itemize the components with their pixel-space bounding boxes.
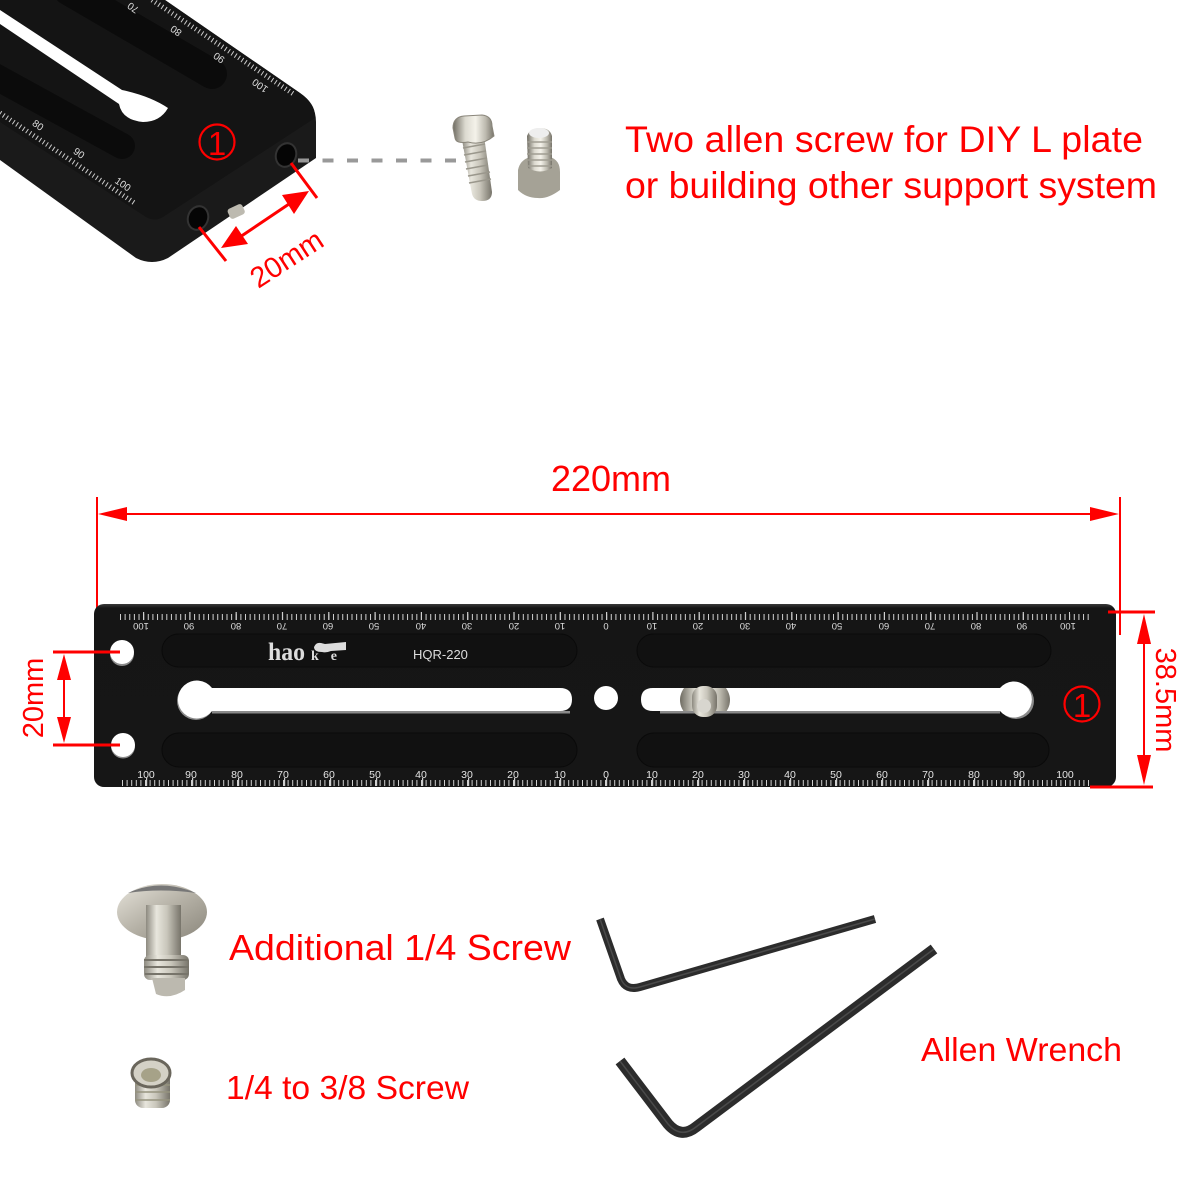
bottom ruler labels: 50 (369, 769, 381, 781)
bottom ruler labels (137, 769, 1074, 781)
upper ruler labels: 100 (250, 76, 271, 94)
left mounting holes (110, 640, 135, 757)
lower ruler labels: 80 (30, 118, 46, 134)
callout: allen screw note: or building other support system (625, 164, 1157, 206)
bottom ruler labels: 20 (507, 769, 519, 781)
top ruler labels: 30 (740, 620, 750, 631)
top ruler labels: 90 (184, 620, 194, 631)
20mm label: 20mm (18, 658, 50, 738)
38.5mm height dimension (1090, 612, 1155, 787)
bottom ruler ticks (122, 782, 1090, 783)
top ruler labels: 60 (879, 620, 889, 631)
lower ruler labels: 100 (112, 176, 133, 194)
plate top face (0, 0, 315, 220)
icon: large allen wrench (620, 949, 934, 1132)
icon: allen screw one (453, 115, 494, 201)
model number: HQR-220 (413, 647, 468, 662)
icon: small allen wrench (600, 919, 875, 988)
label: allen wrench: Allen Wrench (921, 1031, 1122, 1068)
panel: angled plate close-up (0, 0, 456, 295)
lower ruler labels (30, 118, 133, 194)
callout: allen screw note: Two allen screw for DIY L plate (625, 118, 1143, 160)
bottom ruler labels: 10 (646, 769, 658, 781)
threaded hole left (184, 203, 212, 233)
panel: main plate (94, 604, 1116, 787)
top ruler labels: 90 (1017, 620, 1027, 631)
upper ruler labels (125, 0, 271, 94)
label: 1/4 to 3/8 screw: 1/4 to 3/8 Screw (226, 1069, 469, 1106)
bottom ruler labels: 90 (1013, 769, 1025, 781)
top ruler labels: 30 (462, 620, 472, 631)
top ruler labels: 40 (416, 620, 426, 631)
220mm dimension arrow (97, 497, 1120, 635)
slot bottom shadows (110, 642, 1034, 758)
upper ruler ticks (152, 0, 295, 95)
upper left groove (162, 634, 577, 667)
top ruler labels: 80 (231, 620, 241, 631)
lower ruler labels: 90 (71, 146, 87, 162)
threaded hole right (272, 140, 300, 170)
bottom ruler labels: 90 (185, 769, 197, 781)
bottom ruler labels: 20 (692, 769, 704, 781)
bottom ruler labels: 100 (1056, 769, 1074, 781)
circled number 1 (1064, 686, 1100, 724)
brand logo: ke (311, 649, 337, 664)
top ruler labels: 0 (603, 620, 609, 631)
lower groove (0, 68, 122, 146)
lower left groove (162, 733, 577, 767)
top ruler ticks (120, 616, 1090, 617)
top ruler labels: 20 (693, 620, 703, 631)
lower right groove (637, 733, 1049, 767)
keyhole slot (0, 10, 168, 122)
upper ruler labels: 80 (168, 22, 184, 38)
top ruler labels: 80 (971, 620, 981, 631)
left slot (178, 680, 572, 719)
top ruler labels: 100 (1060, 620, 1076, 631)
top ruler labels: 70 (925, 620, 935, 631)
bottom ruler labels: 30 (461, 769, 473, 781)
bottom ruler labels: 50 (830, 769, 842, 781)
bottom ruler labels: 60 (323, 769, 335, 781)
brand logo (268, 639, 346, 666)
top ruler labels: 50 (369, 620, 379, 631)
plate body (94, 604, 1116, 787)
bottom ruler labels: 10 (554, 769, 566, 781)
upper ruler labels: 90 (211, 49, 227, 65)
top ruler labels: 50 (832, 620, 842, 631)
right slot (641, 682, 1032, 718)
centre hole (594, 686, 618, 710)
top ruler labels: 40 (786, 620, 796, 631)
bottom ruler labels: 100 (137, 769, 155, 781)
brand logo: hao (268, 639, 305, 666)
220mm label: 220mm (551, 458, 671, 499)
top ruler labels: 70 (277, 620, 287, 631)
bottom ruler labels: 70 (277, 769, 289, 781)
bottom ruler labels: 80 (968, 769, 980, 781)
top ruler labels: 100 (133, 620, 149, 631)
top ruler labels: 10 (555, 620, 565, 631)
label: additional 1/4 screw: Additional 1/4 Screw (229, 927, 572, 968)
icon: additional 1/4 screw (117, 884, 207, 996)
icon: allen screw two (518, 128, 560, 198)
small screw under plate (227, 203, 246, 220)
circled number 1: 1 (1073, 687, 1091, 724)
20mm hole spacing dimension (53, 652, 120, 745)
screw in slot (680, 686, 730, 717)
bottom ruler labels: 60 (876, 769, 888, 781)
bottom ruler labels: 70 (922, 769, 934, 781)
icon: 1/4 to 3/8 adapter (132, 1059, 170, 1108)
20mm dimension arrow (199, 163, 317, 261)
38.5mm label: 38.5mm (1149, 648, 1181, 752)
circled number 1: 1 (208, 125, 226, 162)
bottom ruler labels: 30 (738, 769, 750, 781)
bottom ruler labels: 80 (231, 769, 243, 781)
circled number 1 (200, 124, 234, 162)
dashed leader line (298, 158, 456, 162)
bottom ruler labels: 40 (784, 769, 796, 781)
bottom ruler labels: 40 (415, 769, 427, 781)
lower ruler ticks (0, 113, 136, 204)
top ruler labels (133, 620, 1076, 631)
top ruler labels: 20 (509, 620, 519, 631)
plate end side face (0, 0, 316, 262)
top ruler labels: 60 (323, 620, 333, 631)
top ruler labels: 10 (647, 620, 657, 631)
upper groove (68, 0, 212, 74)
bottom ruler labels: 0 (603, 769, 609, 781)
upper right groove (637, 634, 1051, 667)
20mm label: 20mm (245, 224, 330, 295)
